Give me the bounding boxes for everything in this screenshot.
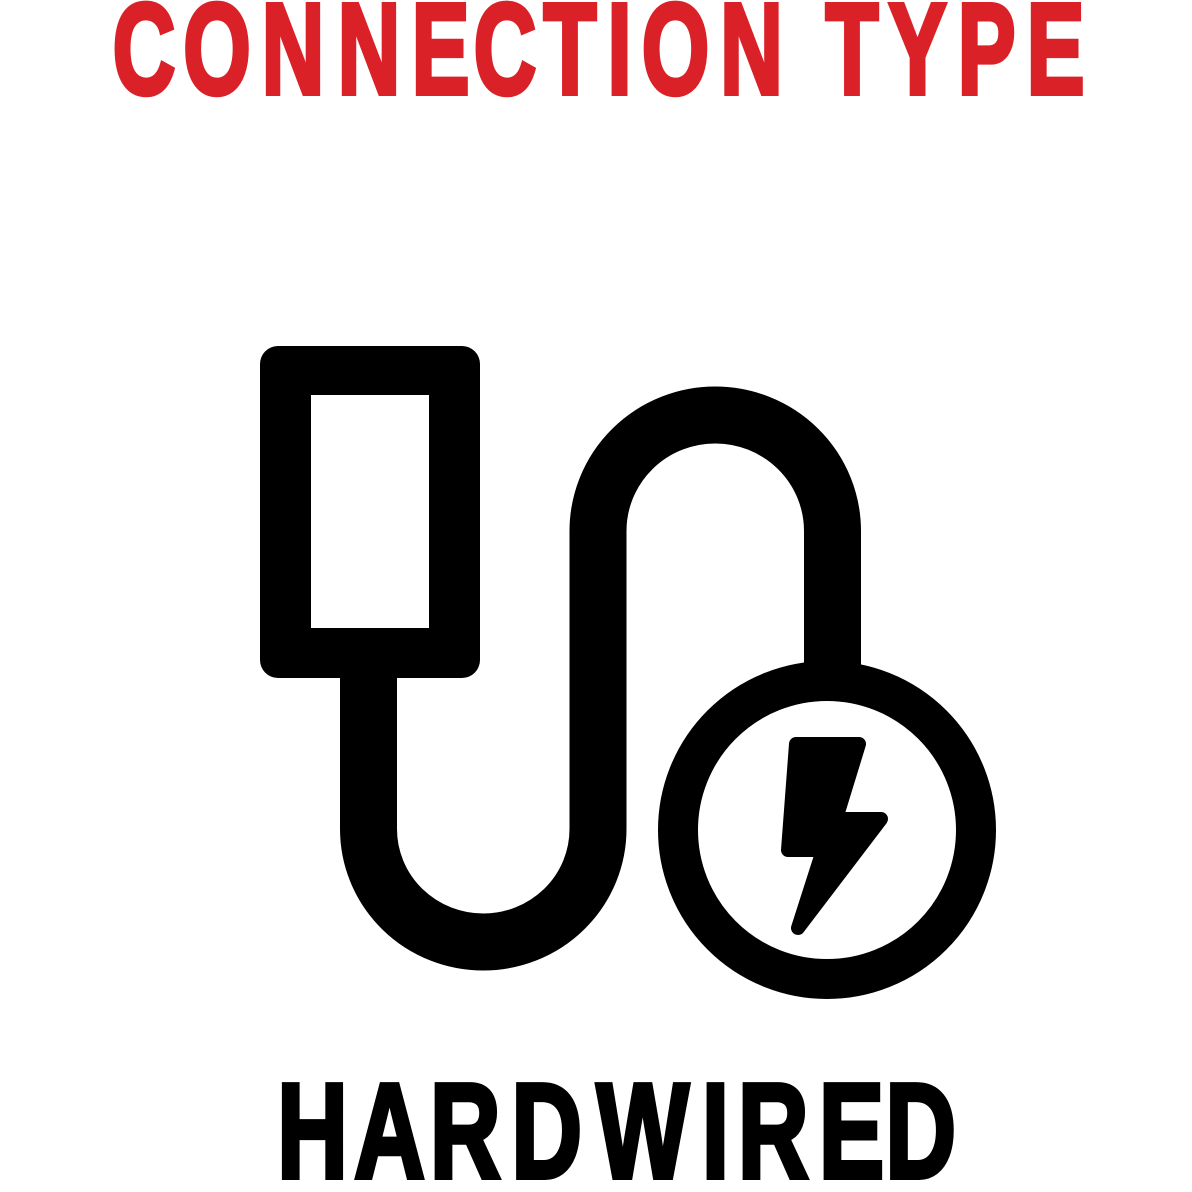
cable: [368, 415, 832, 942]
lightning bolt: [788, 744, 881, 928]
power circle: [678, 681, 976, 979]
plug box: [260, 346, 480, 678]
icon: hardwired cable: [260, 346, 976, 979]
